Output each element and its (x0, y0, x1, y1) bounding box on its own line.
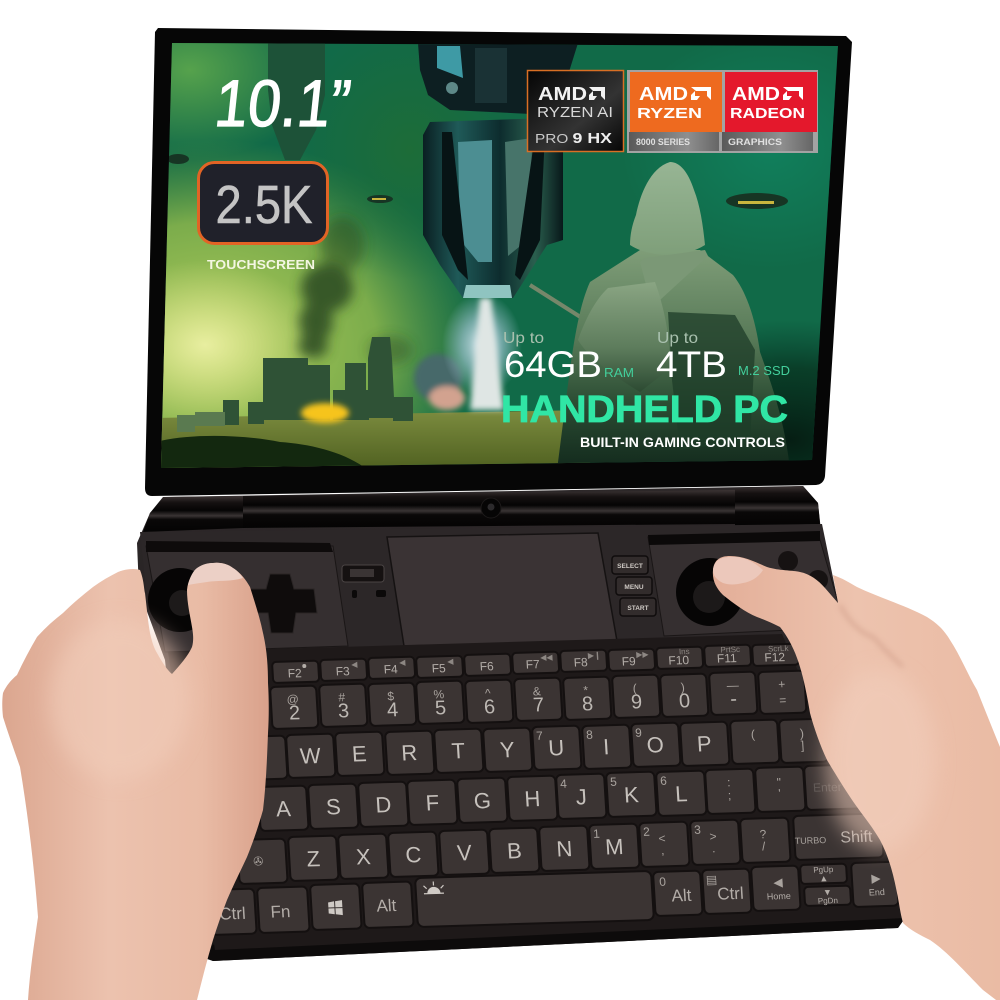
spaceship (418, 43, 578, 298)
lower letter key row: , (661, 843, 665, 857)
number key row: ^ (485, 686, 491, 700)
AMD Ryzen 8000 series badge: RYZEN (637, 105, 702, 122)
home key row: ' (778, 786, 781, 800)
select menu start buttons (612, 556, 656, 616)
right gamepad panel (648, 531, 838, 636)
qwerty key row: 9 (635, 726, 643, 740)
number key row: 9 (630, 691, 643, 713)
keyboard base (137, 486, 905, 961)
number key row: & (532, 684, 541, 698)
qwerty key row: W (299, 743, 322, 769)
AMD Radeon graphics badge (722, 70, 818, 153)
number key row: 0 (678, 690, 691, 712)
number key row: * (583, 683, 589, 697)
home key row: A (275, 796, 292, 821)
home key row: F (425, 790, 440, 815)
hooded figure (557, 162, 790, 470)
lower letter key row: 1 (593, 827, 601, 841)
mode switch (342, 565, 386, 598)
bottom key row: Fn (270, 902, 291, 922)
home key row: K (623, 782, 640, 807)
function key row: PrtSc (720, 645, 740, 655)
home key row: 5 (610, 775, 618, 789)
ground (155, 410, 590, 470)
qwerty key row: ( (750, 727, 755, 741)
qwerty key row: E (351, 741, 367, 767)
qwerty key row: ] (800, 738, 805, 752)
explosion (301, 403, 349, 423)
debris cloud (414, 354, 465, 410)
bottom key row: 0 (659, 875, 667, 889)
qwerty key row: 7 (536, 729, 544, 743)
bottom key row: ◀ (773, 875, 784, 889)
bottom key row: Alt (376, 896, 397, 916)
lower letter key row: > (709, 829, 717, 843)
RAM spec: 64GB (504, 344, 602, 385)
lower letter key row: Z (306, 846, 321, 871)
torso shadow (668, 312, 755, 414)
qwerty key row (238, 719, 829, 780)
function key row: F9 (621, 654, 636, 669)
number key row: ( (632, 681, 637, 695)
home key row: S (325, 794, 341, 819)
lower letter key row: X (355, 844, 372, 869)
flying saucers (167, 154, 788, 209)
thruster glow (444, 298, 520, 392)
bottom key row: Home (767, 891, 791, 902)
home key row: G (473, 788, 492, 814)
built-in gaming controls caption: BUILT-IN GAMING CONTROLS (580, 435, 785, 450)
function key row: F12 (764, 650, 786, 665)
AMD Radeon graphics badge: GRAPHICS (728, 137, 782, 147)
d-pad (242, 574, 317, 633)
number key row (270, 671, 807, 729)
home key row: " (776, 775, 781, 789)
qwerty key row: ) (799, 726, 804, 740)
hinge (143, 486, 820, 532)
home key row: Enter (813, 780, 842, 795)
right joystick (676, 558, 744, 626)
bottom key row: ▼ (823, 887, 832, 897)
bottom key row: ▲ (819, 873, 829, 883)
2.5K badge (198, 162, 328, 244)
thruster beam (470, 298, 504, 410)
number key row: 3 (337, 700, 350, 722)
trees (161, 436, 362, 468)
lower letter key row: N (556, 836, 573, 862)
function key row: F4 (383, 662, 398, 677)
city skyline (177, 337, 413, 432)
strap (640, 250, 708, 300)
number key row: 4 (386, 699, 399, 721)
function key row: F2 (287, 666, 302, 681)
laptop lid and screen bezel (145, 28, 852, 496)
RAM spec: Up to (503, 330, 544, 347)
lower letter key row: ? (759, 827, 767, 841)
home key row: ; (727, 788, 732, 802)
home key row: J (575, 784, 588, 809)
function key row: ◀ (447, 657, 455, 666)
lower letter key row (237, 813, 884, 884)
SSD spec: M.2 SSD (738, 363, 790, 378)
select menu start buttons: START (627, 605, 649, 612)
AMD Ryzen 8000 series badge: AMD (639, 84, 688, 104)
left hand (2, 563, 269, 1000)
lower letter key row: M (604, 834, 624, 860)
rifle (530, 285, 582, 318)
RAM spec: RAM (604, 365, 634, 380)
SSD spec (656, 330, 790, 385)
select menu start buttons: SELECT (617, 563, 643, 570)
qwerty key row: T (451, 738, 466, 764)
function key row: F3 (335, 664, 350, 679)
left palm highlight (50, 620, 190, 780)
webcam (481, 498, 501, 518)
hood (630, 162, 705, 255)
AMD Radeon graphics badge: AMD (732, 84, 780, 104)
screen size label: 10.1” (211, 67, 354, 141)
lower letter key row: ✇ (253, 854, 264, 869)
function key row: ◀ (351, 660, 359, 669)
qwerty key row: P (696, 731, 712, 757)
number key row: = (779, 693, 787, 707)
bottom key row: PgUp (813, 865, 834, 875)
qwerty key row: R (401, 740, 418, 766)
2.5K badge: 2.5K (216, 175, 312, 235)
keyboard deck (168, 634, 905, 950)
qwerty key row: Y (499, 737, 516, 763)
qwerty key row: I (602, 734, 610, 759)
home key row: 6 (660, 774, 668, 788)
AMD Ryzen 8000 series badge: 8000 SERIES (636, 137, 690, 147)
lower letter key row: 2 (643, 825, 651, 839)
lower letter key row: B (506, 838, 522, 863)
bottom key row: PgDn (818, 896, 838, 906)
function key row (272, 644, 799, 683)
home key row: H (524, 786, 541, 812)
function key row: F6 (479, 659, 494, 674)
bottom key row: Ctrl (717, 884, 744, 904)
touchscreen label: TOUCHSCREEN (207, 257, 315, 272)
AMD Ryzen AI badge: RYZEN AI (537, 104, 613, 121)
left gamepad panel (146, 541, 348, 652)
function key row: F10 (668, 653, 690, 668)
number key row: 6 (483, 696, 496, 718)
function key row: Ins (679, 647, 690, 656)
number key row: $ (387, 689, 395, 703)
bottom key row: ▶ (871, 871, 882, 885)
bottom key row: End (869, 887, 885, 898)
number key row: - (730, 688, 738, 710)
number key row: + (778, 677, 786, 691)
AMD Ryzen AI badge: PRO 9 HX (535, 130, 612, 147)
SSD spec: Up to (657, 330, 698, 347)
right hand crease (840, 605, 903, 667)
qwerty key row: 8 (586, 728, 594, 742)
background tower (268, 43, 325, 160)
function key row: ◀◀ (540, 653, 554, 662)
lower letter key row: V (456, 840, 473, 865)
right hand (713, 556, 1000, 1000)
RAM spec (503, 330, 634, 385)
home key row: : (727, 775, 731, 789)
handheld pc heading: HANDHELD PC (501, 389, 788, 431)
function key row: ▶▶ (636, 650, 650, 659)
lower letter key row: . (712, 841, 716, 855)
home key row: D (375, 792, 392, 818)
lower letter key row: Shift (840, 829, 873, 847)
lower letter key row: < (658, 831, 666, 845)
function key row: ▶❙ (588, 651, 601, 660)
left joystick (148, 568, 212, 632)
number key row: 5 (434, 697, 447, 719)
right thumbnail (713, 557, 763, 584)
qwerty key row: U (548, 735, 565, 761)
function key row: F8 (573, 655, 588, 670)
function key row: ◀ (399, 658, 407, 667)
face buttons (778, 551, 828, 590)
touchpad (387, 533, 617, 646)
number key row: ) (680, 680, 685, 694)
number key row: — (726, 678, 739, 692)
number key row: 7 (532, 694, 545, 716)
bottom key row (207, 862, 899, 935)
AMD Ryzen AI badge: AMD (538, 84, 587, 104)
AMD Ryzen AI badge (528, 70, 624, 152)
AMD Ryzen 8000 series badge (627, 70, 724, 153)
lower letter key row: 3 (694, 823, 702, 837)
function key row: F7 (525, 657, 540, 672)
bottom key row: Alt (671, 886, 692, 905)
function key row: ScrLk (768, 644, 790, 654)
function key row: F5 (431, 661, 446, 676)
home key row (258, 764, 863, 831)
lower letter key row: TURBO (794, 835, 827, 846)
bottom key row: Ctrl (219, 904, 246, 924)
screen artwork (161, 43, 838, 468)
home key row: 4 (560, 777, 568, 791)
number key row: 2 (288, 702, 301, 724)
qwerty key row: O (646, 732, 665, 758)
number key row: % (433, 687, 445, 701)
number key row: @ (286, 692, 299, 707)
function key row: F11 (716, 651, 737, 666)
upper control deck (140, 524, 838, 660)
home key row: L (674, 781, 688, 806)
left thumbnail (188, 563, 243, 585)
select menu start buttons: MENU (624, 584, 644, 591)
smoke plume (298, 217, 412, 364)
SSD spec: 4TB (656, 344, 727, 385)
AMD Radeon graphics badge: RADEON (730, 105, 805, 122)
lower letter key row: C (405, 842, 422, 868)
number key row: 8 (581, 693, 594, 715)
number key row: # (338, 690, 346, 704)
bottom key row: ▤ (706, 873, 718, 887)
backpack (578, 282, 669, 392)
lower letter key row: / (762, 839, 766, 853)
right hand highlight (825, 670, 935, 850)
front edge of the base (200, 912, 905, 961)
